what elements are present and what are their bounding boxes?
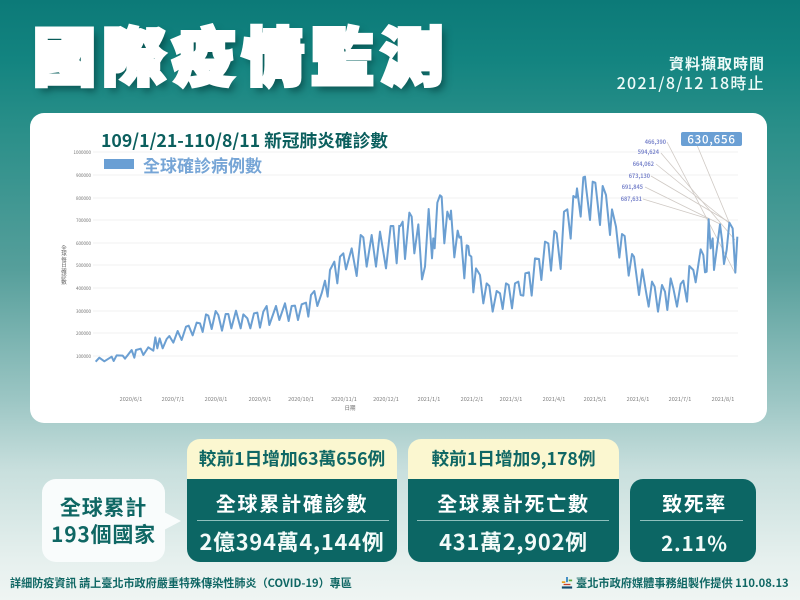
- y axis labels: 700000: [76, 218, 91, 224]
- x axis labels: 2020/7/1: [162, 395, 184, 403]
- callout: 193 countries: 193個國家: [51, 519, 156, 549]
- data capture time: [617, 53, 765, 94]
- x axis labels: 2021/6/1: [627, 395, 649, 403]
- chart title: 109/1/21-110/8/11 新冠肺炎確診數: [101, 127, 388, 153]
- y axis labels: 100000: [76, 354, 91, 360]
- callout: 193 countries: 全球累計: [60, 492, 147, 522]
- y axis labels: 600000: [76, 241, 91, 247]
- x axis labels: 2021/4/1: [543, 395, 565, 403]
- y axis labels: [74, 150, 92, 360]
- callout value labels: 664,062: [633, 160, 654, 168]
- x axis labels: 2021/1/1: [418, 395, 440, 403]
- callout value labels: [621, 138, 666, 203]
- y axis labels: 500000: [76, 263, 91, 269]
- panel: line chart card: [30, 113, 767, 423]
- panel: global confirmed cases: [187, 439, 397, 562]
- callout value labels: 673,130: [629, 172, 650, 180]
- daily increase: 較前1日增加63萬656例: [199, 445, 385, 471]
- y axis labels: 1000000: [74, 150, 92, 156]
- y axis title: 全球每日確診數: [60, 245, 68, 286]
- x axis labels: 2020/6/1: [120, 395, 142, 403]
- y axis labels: 200000: [76, 331, 91, 337]
- chart legend: [104, 152, 262, 177]
- callout: latest value: 630,656: [687, 132, 736, 148]
- panel: fatality rate: [630, 479, 756, 562]
- title: 國際疫情監測: [33, 8, 450, 99]
- panel heading: 全球累計確診數: [216, 488, 368, 517]
- x axis labels: 2020/10/1: [288, 395, 314, 403]
- data line 2020: [96, 225, 399, 362]
- x axis title: 日期: [344, 404, 356, 412]
- x axis labels: 2021/7/1: [669, 395, 691, 403]
- y axis labels: 900000: [76, 173, 91, 179]
- daily increase: [408, 439, 619, 487]
- footer: credit: 臺北市政府媒體事務組製作提供 110.08.13: [576, 575, 789, 591]
- x axis labels: 2020/9/1: [249, 395, 271, 403]
- x axis labels: 2020/8/1: [205, 395, 227, 403]
- panel: global deaths: [408, 439, 619, 562]
- x axis labels: 2020/11/1: [331, 395, 357, 403]
- callout value labels: 594,624: [638, 148, 660, 156]
- panel value: 431萬2,902例: [439, 526, 588, 557]
- panel value: 2億394萬4,144例: [200, 526, 384, 557]
- x axis labels: 2020/12/1: [373, 395, 399, 403]
- footer: source note: 詳細防疫資訊 請上臺北市政府嚴重特殊傳染性肺炎（COVID-19）專區: [10, 575, 352, 591]
- daily increase: [187, 439, 397, 487]
- y axis labels: 300000: [76, 309, 91, 315]
- x axis labels: 2021/5/1: [584, 395, 606, 403]
- data capture time: 2021/8/12 18時止: [617, 70, 765, 94]
- legend label: 全球確診病例數: [143, 152, 262, 177]
- legend swatch: [104, 159, 134, 169]
- y axis labels: 800000: [76, 196, 91, 202]
- callout: 193 countries: [42, 479, 180, 562]
- y axis labels: 400000: [76, 286, 91, 292]
- panel value: 2.11%: [661, 527, 728, 557]
- panel heading: 全球累計死亡數: [437, 488, 590, 517]
- callout value labels: 691,845: [622, 183, 643, 191]
- x axis labels: [120, 395, 734, 403]
- x axis labels: 2021/3/1: [500, 395, 522, 403]
- callout value labels: 687,631: [621, 195, 642, 203]
- icon: Taipei logo: [562, 577, 572, 589]
- callout value labels: 466,390: [645, 138, 666, 146]
- data capture time: 資料擷取時間: [669, 53, 765, 74]
- panel heading: 致死率: [662, 488, 727, 517]
- callout leader lines: [643, 142, 735, 273]
- daily increase: 較前1日增加9,178例: [431, 445, 596, 471]
- x axis labels: 2021/2/1: [461, 395, 483, 403]
- data line 2021: [400, 177, 737, 312]
- x axis labels: 2021/8/1: [712, 395, 734, 403]
